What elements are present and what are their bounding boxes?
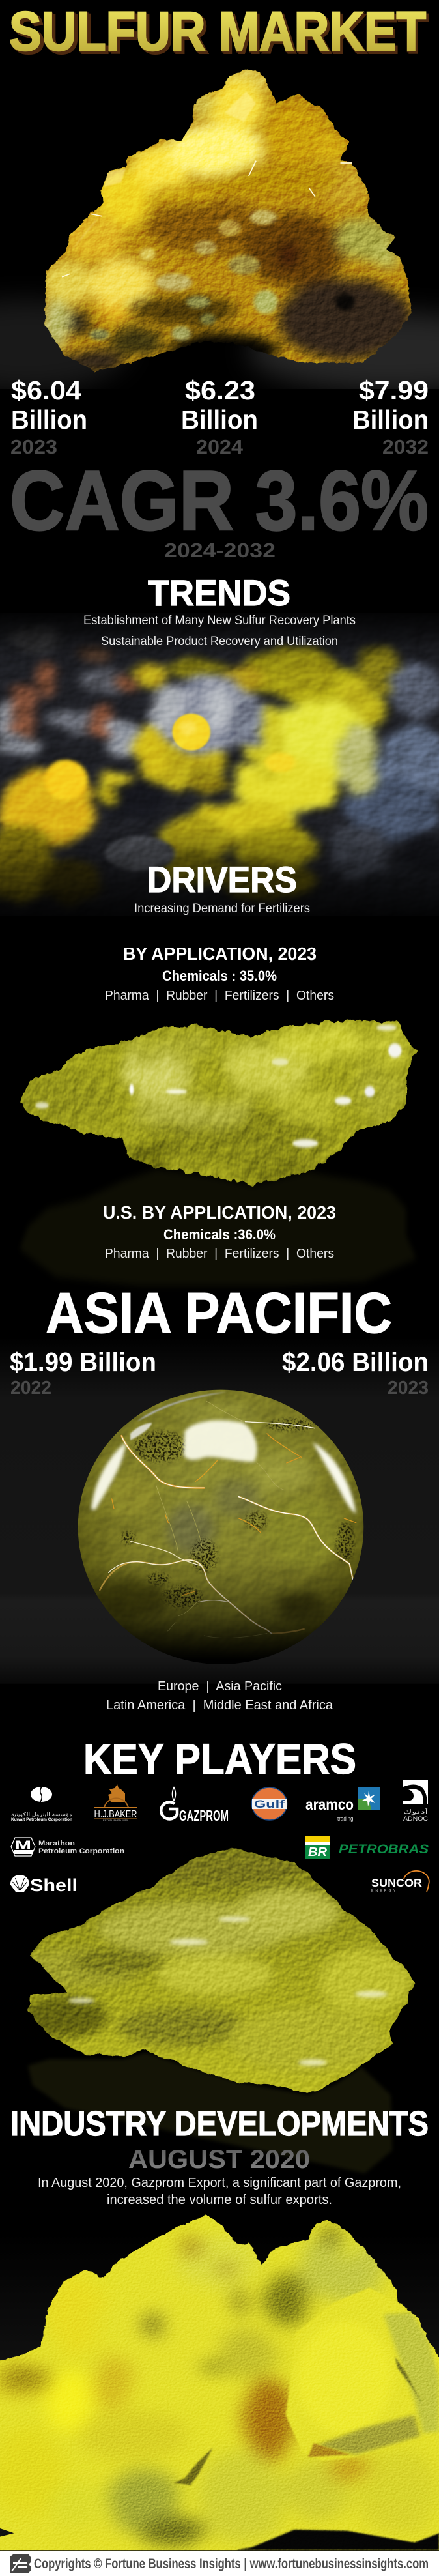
logo: Aramco trading: aramco xyxy=(305,1796,354,1813)
logo: Gazprom: GAZPROM xyxy=(179,1807,229,1824)
logo: Gulf: Gulf xyxy=(254,1798,285,1810)
logo: Petrobras xyxy=(305,1836,429,1859)
heading: asia pacific: ASIA PACIFIC xyxy=(46,1281,392,1345)
logo: Marathon Petroleum Corporation: M xyxy=(15,1839,31,1853)
logo: Kuwait Petroleum Corporation xyxy=(11,1787,72,1822)
image: yellow sulfur lumps xyxy=(0,2209,439,2550)
region values: 2022 xyxy=(10,1378,51,1398)
trends and drivers background image: sulfur deposits xyxy=(0,613,439,919)
region values: $1.99 Billion xyxy=(10,1347,156,1377)
heading: key players: KEY PLAYERS xyxy=(83,1735,356,1783)
segment: by application: Chemicals : 35.0% xyxy=(162,968,277,984)
logo: Marathon Petroleum Corporation: Marathon xyxy=(38,1840,75,1847)
image: polished stone sphere xyxy=(74,1386,369,1668)
logo: ADNOC: أدنوك xyxy=(403,1807,428,1816)
stat: 2032 market size xyxy=(352,375,429,458)
hero image: sulfur crystal rock xyxy=(0,65,439,391)
region list: Europe | Asia Pacific xyxy=(158,1679,282,1694)
segment: U.S. by application: Chemicals :36.0% xyxy=(163,1226,276,1243)
drivers text: Increasing Demand for Fertilizers xyxy=(134,902,310,916)
footer bar xyxy=(0,2551,439,2576)
segment: U.S. by application: U.S. BY APPLICATION, 2023 xyxy=(103,1202,336,1223)
region values: $2.06 Billion xyxy=(282,1347,429,1377)
logo: Shell xyxy=(10,1875,78,1895)
development text: increased the volume of sulfur exports. xyxy=(107,2193,332,2207)
region list xyxy=(106,1679,333,1713)
heading: trends: TRENDS xyxy=(148,572,290,613)
CAGR: 2024-2032 xyxy=(164,539,276,562)
stat: 2032 market size: $7.99 xyxy=(359,375,429,405)
stat: 2023 market size: Billion xyxy=(11,405,87,435)
segment: U.S. by application: Pharma | Rubber | Fertilizers | Others xyxy=(105,1247,334,1261)
logo: ADNOC: ADNOC xyxy=(403,1816,428,1823)
development date: AUGUST 2020 xyxy=(128,2145,310,2174)
logo: Aramco trading xyxy=(305,1787,380,1822)
logo: Kuwait Petroleum Corporation: مؤسسة البترول الكويتية xyxy=(11,1812,72,1817)
logo: Petrobras: BR xyxy=(308,1845,327,1859)
stat: 2024 market size: Billion xyxy=(181,405,258,435)
trends list: Sustainable Product Recovery and Utilization xyxy=(101,635,338,648)
segment: by application: Pharma | Rubber | Fertilizers | Others xyxy=(105,989,334,1003)
segment: by application xyxy=(105,944,334,1003)
trends list: Establishment of Many New Sulfur Recovery Plants xyxy=(83,614,356,628)
stat: 2024 market size: $6.23 xyxy=(185,375,255,405)
stat: 2024 market size: 2024 xyxy=(196,435,244,458)
logo: Petrobras: PETROBRAS xyxy=(339,1843,429,1857)
logo: H.J. Baker xyxy=(94,1784,137,1822)
stat: 2024 market size xyxy=(181,375,258,458)
heading: drivers: DRIVERS xyxy=(147,859,297,900)
footer logo xyxy=(10,2554,31,2573)
stat: 2023 market size: $6.04 xyxy=(11,375,81,405)
logo: Aramco trading: trading xyxy=(337,1816,353,1822)
logo: ADNOC xyxy=(403,1780,428,1823)
region list: Latin America | Middle East and Africa xyxy=(106,1698,333,1713)
logo: H.J. Baker: ESTABLISHED 1850 xyxy=(103,1819,128,1822)
image: yellow crystal with reflection xyxy=(14,1011,420,1286)
logo: Shell: Shell xyxy=(30,1875,78,1895)
logo: H.J. Baker: H.J.BAKER xyxy=(94,1809,137,1820)
logo: Gazprom xyxy=(161,1787,229,1824)
logo: Marathon Petroleum Corporation: Petroleum Corporation xyxy=(38,1847,124,1855)
logo: Suncor Energy: SUNCOR xyxy=(371,1877,422,1889)
development text xyxy=(38,2176,401,2207)
stat: 2023 market size xyxy=(10,375,87,458)
segment: U.S. by application xyxy=(103,1202,336,1261)
logo: Marathon Petroleum Corporation xyxy=(11,1838,124,1856)
stat: 2032 market size: Billion xyxy=(352,405,429,435)
segment: by application: BY APPLICATION, 2023 xyxy=(123,944,317,964)
logo: Suncor Energy: ENERGY xyxy=(371,1889,396,1893)
stat: 2032 market size: 2032 xyxy=(382,435,429,458)
region background xyxy=(0,1337,439,1684)
logo: Gulf xyxy=(251,1787,287,1820)
region values xyxy=(10,1347,429,1398)
image: olive crystal with reflection xyxy=(13,1844,423,2173)
region values: 2023 xyxy=(388,1378,429,1398)
trends list xyxy=(83,614,356,648)
stat: 2023 market size: 2023 xyxy=(10,435,57,458)
development text: In August 2020, Gazprom Export, a significant part of Gazprom, xyxy=(38,2176,401,2190)
logo: Kuwait Petroleum Corporation: Kuwait Petroleum Corporation xyxy=(11,1817,72,1822)
logo: Suncor Energy xyxy=(371,1871,429,1893)
